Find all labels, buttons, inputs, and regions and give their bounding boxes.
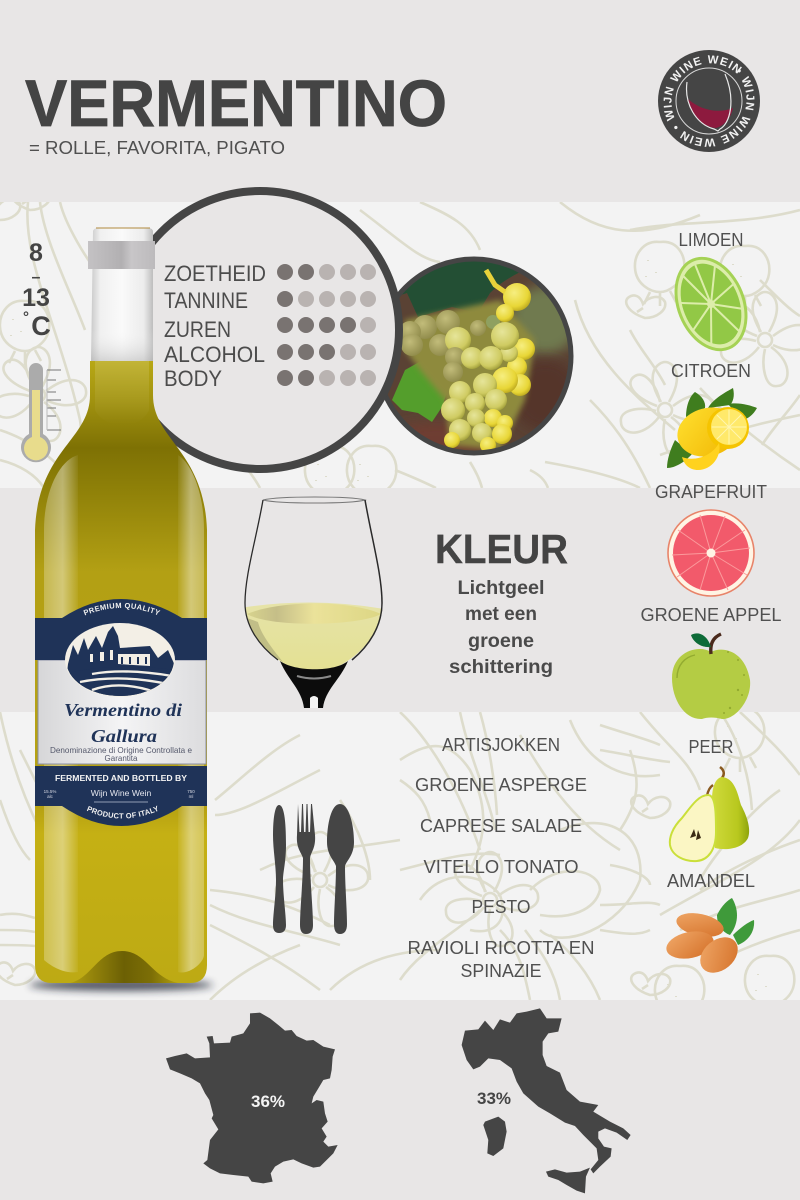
taste labels: BODY: [164, 366, 222, 391]
food pairing list: VITELLO TONATO: [424, 856, 578, 877]
map: France: [166, 1013, 338, 1183]
wine label: [35, 599, 207, 826]
food pairing list: SPINAZIE: [460, 960, 542, 981]
food pairing list: CAPRESE SALADE: [420, 815, 582, 836]
food pairing list: ARTISJOKKEN: [442, 734, 560, 755]
bottle neck and capsule: [88, 228, 155, 362]
wine label: Denominazione di Origine Controllata e: [50, 745, 192, 755]
bottle body: [35, 361, 207, 983]
icon: wine glass: [240, 497, 390, 708]
temperature: 8–13 °C: °: [23, 309, 29, 326]
logo badge: • WIJN WINE WEIN • WIJN WINE WEIN: [664, 55, 754, 147]
wine label: Vermentino di: [64, 700, 182, 720]
icon: lemons: [667, 388, 757, 470]
icon: thermometer: [21, 363, 61, 462]
colour description: schittering: [449, 657, 553, 678]
temperature: 8–13 °C: [22, 239, 51, 341]
aroma labels: PEER: [688, 736, 734, 757]
temperature: 8–13 °C: –: [32, 269, 41, 286]
patterned bands: [0, 187, 800, 1030]
colour description: Lichtgeel: [458, 578, 544, 599]
wine label: alc: [47, 794, 54, 799]
aroma labels: AMANDEL: [667, 870, 755, 891]
food pairing list: GROENE ASPERGE: [415, 774, 587, 795]
subtitle: synonyms: = ROLLE, FAVORITA, PIGATO: [29, 137, 285, 158]
taste labels: TANNINE: [164, 288, 248, 313]
aroma labels: CITROEN: [671, 360, 751, 381]
aroma labels: GROENE APPEL: [640, 604, 782, 625]
food pairing list: PESTO: [472, 896, 530, 917]
food pairing list: RAVIOLI RICOTTA EN: [408, 937, 594, 958]
icon: grapefruit: [668, 510, 754, 596]
icon: pear: [670, 767, 749, 861]
taste labels: ZOETHEID: [164, 261, 266, 286]
panel: taste profile circle: [121, 191, 399, 469]
wine label: Garantita: [105, 754, 138, 763]
map: Italy: [462, 1008, 631, 1193]
wine label: Gallura: [91, 726, 157, 746]
temperature: 8–13 °C: 8: [29, 239, 43, 267]
taste labels: ALCOHOL: [164, 342, 265, 367]
wine label: 15.5%: [44, 789, 56, 794]
wine label: PRODUCT OF ITALY: [86, 806, 158, 818]
title: VERMENTINO: [25, 66, 447, 140]
Italy share: 33%: [477, 1089, 511, 1108]
aroma labels: GRAPEFRUIT: [655, 481, 767, 502]
icon: lime: [661, 246, 761, 362]
taste labels: ZUREN: [164, 317, 231, 342]
wine label: ml: [189, 794, 193, 799]
label illustration: farmhouse: [64, 623, 176, 700]
colour description: met een: [465, 604, 537, 625]
icon: green apple: [672, 633, 750, 719]
aroma labels: [640, 229, 782, 891]
aroma labels: LIMOEN: [678, 229, 744, 250]
wine label: Wijn Wine Wein: [91, 788, 151, 798]
temperature: 8–13 °C: 13: [22, 284, 50, 312]
France share: 36%: [251, 1092, 285, 1111]
temperature: 8–13 °C: C: [31, 311, 51, 341]
wine bottle: [26, 228, 216, 998]
wine label: PREMIUM QUALITY: [83, 602, 160, 616]
colour description: groene: [468, 631, 534, 652]
taste rating dots: [277, 264, 376, 386]
icon: almonds with leaf: [664, 898, 754, 980]
food pairing list: [408, 734, 594, 981]
wine label: FERMENTED AND BOTTLED BY: [55, 773, 187, 783]
grape photo circle: [384, 256, 574, 456]
colour description: [449, 578, 553, 678]
taste labels: [164, 261, 266, 391]
wine label: 750: [187, 789, 195, 794]
heading: colour: KLEUR: [435, 526, 568, 572]
icon: cutlery: [273, 804, 354, 934]
